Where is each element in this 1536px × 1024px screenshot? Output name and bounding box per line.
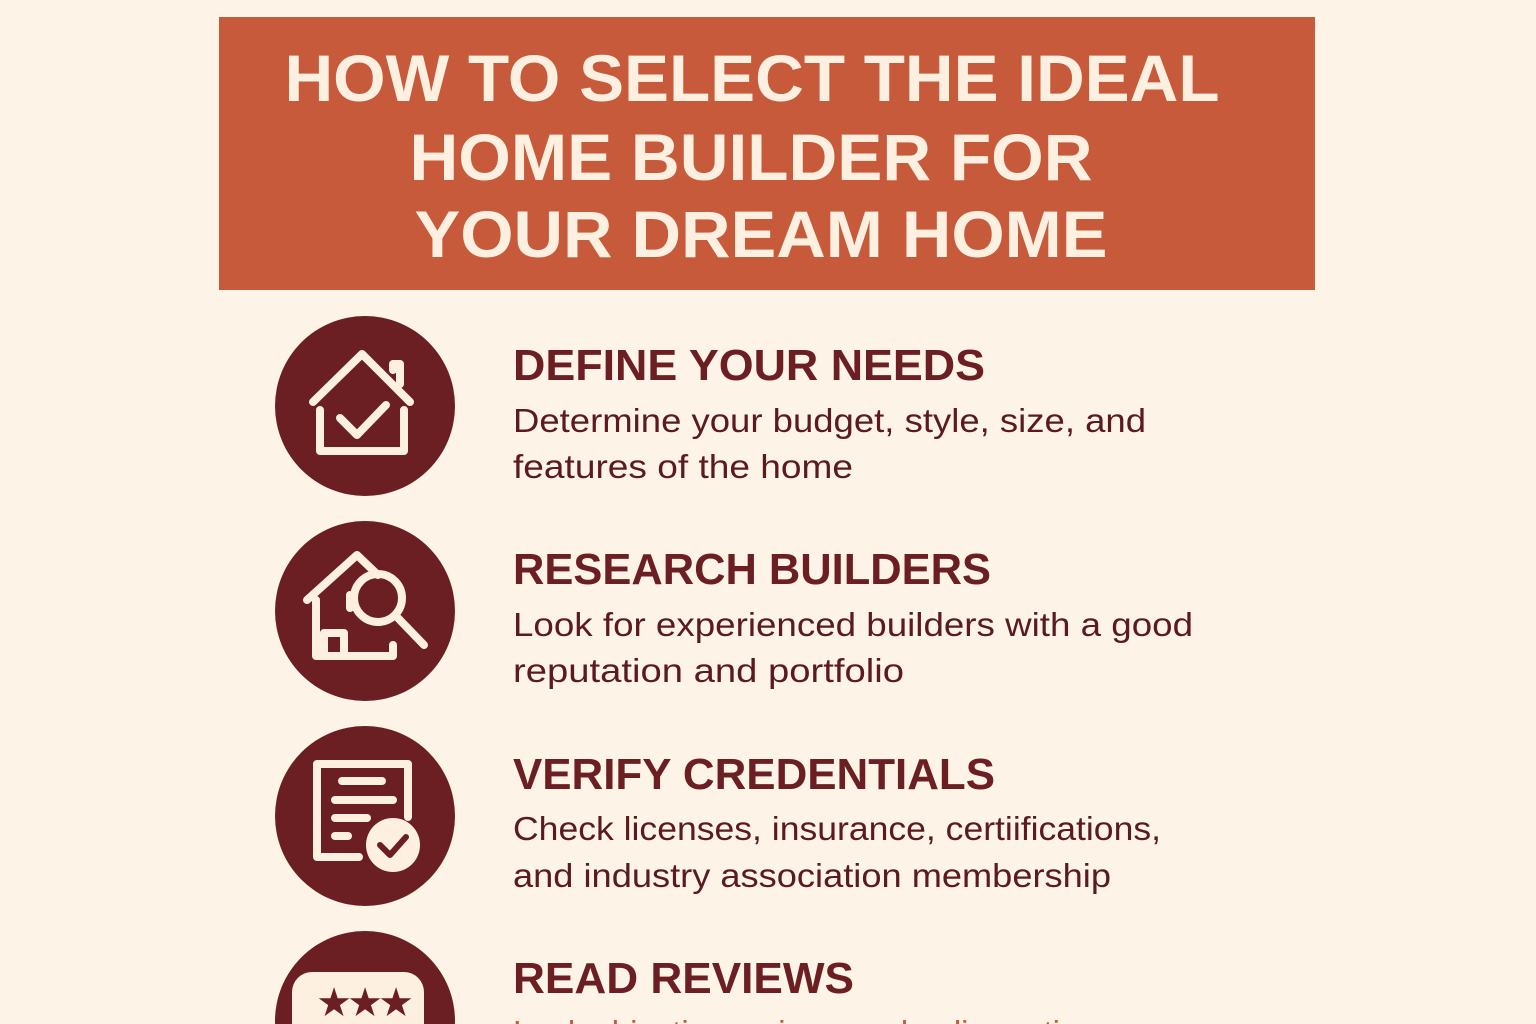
description: features of the home — [513, 448, 853, 485]
description — [513, 606, 1193, 689]
title: YOUR DREAM HOME — [414, 197, 1108, 271]
description — [513, 810, 1161, 894]
title: HOW TO SELECT THE IDEAL — [284, 41, 1220, 115]
heading: RESEARCH BUILDERS — [513, 545, 991, 594]
step 3: verify credentials — [275, 726, 1161, 906]
title — [284, 41, 1220, 271]
description: Check licenses, insurance, certiifications, — [513, 810, 1161, 847]
step 4: read reviews — [275, 931, 1113, 1024]
heading: VERIFY CREDENTIALS — [513, 750, 995, 799]
title banner — [219, 17, 1315, 290]
icon: document with check — [275, 726, 455, 906]
icon: house with check — [275, 316, 455, 496]
description: reputation and portfolio — [513, 652, 904, 689]
heading: DEFINE YOUR NEEDS — [513, 341, 985, 390]
description: Look for experienced builders with a good — [513, 606, 1193, 643]
description: Determine your budget, style, size, and — [513, 402, 1146, 439]
description — [513, 402, 1146, 485]
step 1: define your needs — [275, 316, 1146, 496]
icon: house with magnifier — [275, 521, 455, 701]
icon: review stars — [275, 931, 455, 1024]
step 2: research builders — [275, 521, 1193, 701]
title: HOME BUILDER FOR — [410, 120, 1092, 194]
description: and industry association membership — [513, 857, 1111, 894]
heading: READ REVIEWS — [513, 954, 854, 1003]
